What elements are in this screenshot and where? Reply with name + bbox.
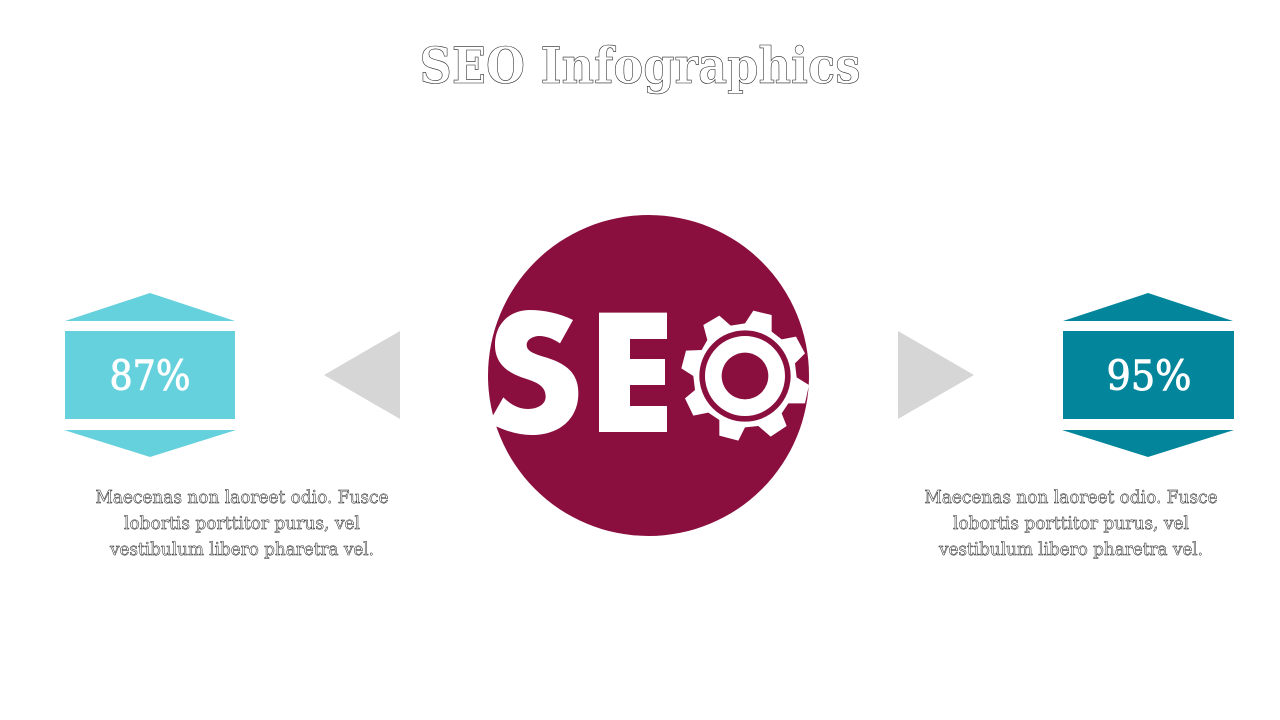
left percentage: 87% bbox=[110, 352, 190, 400]
right description text bbox=[924, 487, 1218, 560]
left description text bbox=[96, 487, 388, 560]
left description text: vestibulum libero pharetra vel. bbox=[109, 539, 374, 560]
arrow: left bbox=[324, 331, 400, 419]
icon: gear bbox=[681, 311, 809, 441]
panel: left stat 87% bbox=[64, 293, 236, 457]
title: SEO Infographics bbox=[420, 36, 860, 95]
letter S bbox=[493, 310, 578, 435]
right description text: vestibulum libero pharetra vel. bbox=[938, 539, 1203, 560]
right percentage: 95% bbox=[1106, 352, 1192, 400]
arrow: right bbox=[898, 331, 974, 419]
left description text: Maecenas non laoreet odio. Fusce bbox=[96, 487, 388, 508]
panel: right stat 95% bbox=[1062, 293, 1234, 457]
right description text: Maecenas non laoreet odio. Fusce bbox=[924, 487, 1218, 508]
right description text: lobortis porttitor purus, vel bbox=[953, 513, 1189, 534]
icon: SEO circle with gear bbox=[488, 215, 809, 536]
letter E bbox=[599, 313, 667, 432]
left description text: lobortis porttitor purus, vel bbox=[124, 513, 360, 534]
